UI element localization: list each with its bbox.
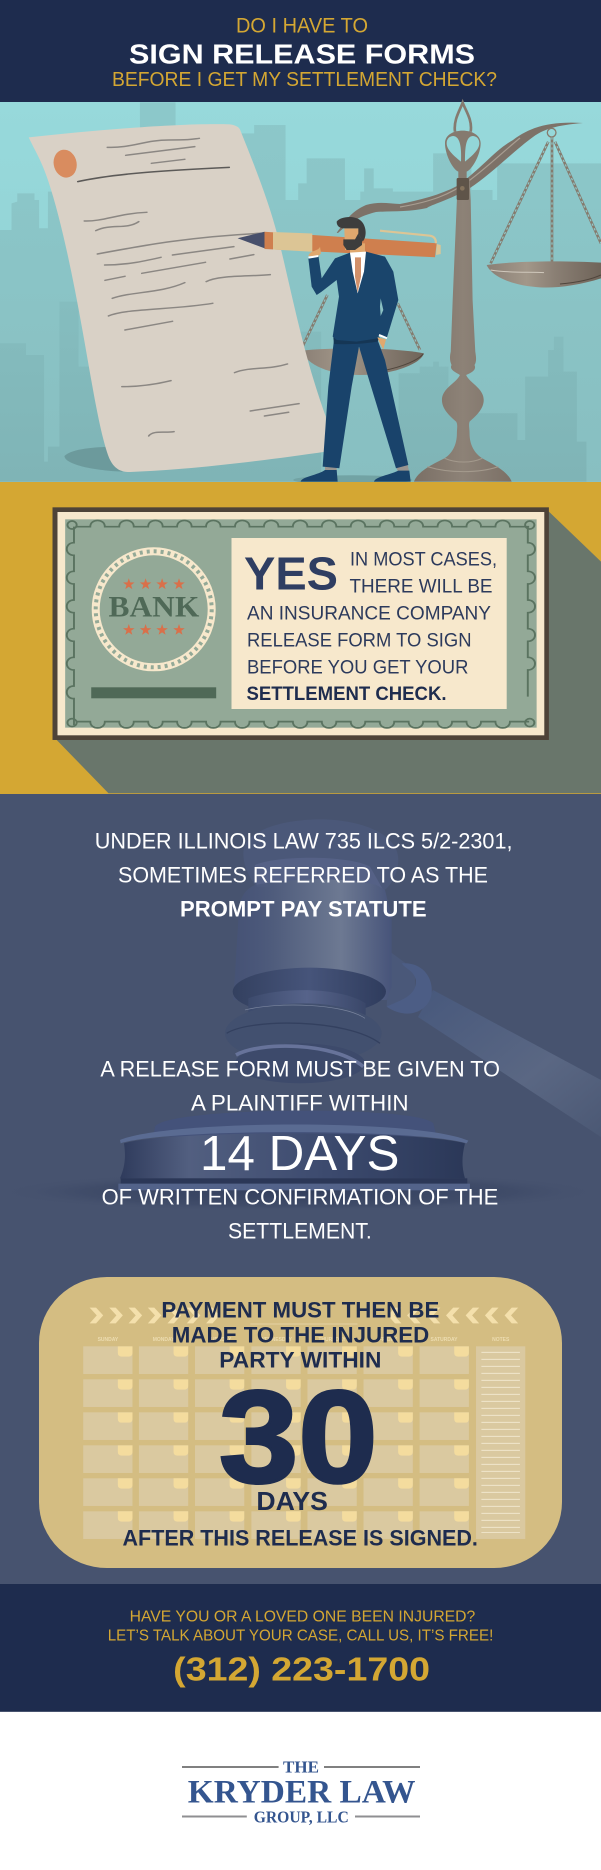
text: release form deadline: A RELEASE FORM MUST BE GIVEN TO	[100, 1056, 500, 1081]
gavel flange	[233, 968, 386, 1016]
hair	[337, 217, 366, 242]
gavel top cap	[243, 819, 398, 892]
logo: The Kryder Law Group, LLC	[182, 1758, 420, 1826]
calendar day labels: THURSDAY	[318, 1337, 346, 1343]
scale: pillar	[414, 178, 512, 482]
logo: The Kryder Law Group, LLC: GROUP, LLC	[254, 1807, 349, 1826]
heading: before I get my settlement check: BEFORE I GET MY SETTLEMENT CHECK?	[112, 69, 497, 91]
calendar day labels: SATURDAY	[431, 1337, 458, 1343]
answer text: SETTLEMENT CHECK.	[246, 683, 446, 705]
calendar text: payment terms	[122, 1297, 478, 1551]
gavel illustration	[0, 819, 601, 1212]
bank seal	[96, 551, 212, 667]
calendar day labels	[98, 1337, 510, 1343]
calendar text: payment terms: DAYS	[256, 1486, 328, 1516]
document seal	[52, 148, 79, 179]
text: release form deadline: A PLAINTIFF WITHIN	[191, 1090, 409, 1115]
text: release form deadline: OF WRITTEN CONFIRMATION OF THE	[102, 1184, 498, 1209]
bank label: BANK	[108, 591, 200, 624]
call to action text	[108, 1608, 493, 1644]
text box: yes answer	[232, 538, 507, 709]
panel: slate section with gavel	[0, 794, 601, 1584]
check frame	[53, 507, 549, 740]
stars	[123, 578, 185, 635]
gavel collar	[387, 952, 415, 1007]
panel: gold bank check section	[0, 482, 601, 794]
scale: left pan and chains	[302, 295, 424, 375]
text: release form deadline: SETTLEMENT.	[228, 1218, 372, 1243]
panel: footer call to action	[0, 1584, 601, 1712]
heading: sign release forms: SIGN RELEASE FORMS	[129, 38, 475, 69]
scale: pivot and top ornament	[445, 103, 601, 287]
chevrons	[90, 1308, 518, 1323]
pen	[238, 231, 441, 257]
sound block	[118, 1111, 470, 1190]
gavel handle	[418, 990, 601, 1137]
call to action text: HAVE YOU OR A LOVED ONE BEEN INJURED?	[130, 1608, 475, 1625]
calendar grid	[83, 1308, 525, 1539]
text: statute: UNDER ILLINOIS LAW 735 ILCS 5/2-2301,	[95, 828, 512, 853]
calendar day labels: TUESDAY	[208, 1337, 232, 1343]
calendar day labels: FRIDAY	[379, 1337, 398, 1343]
heading: do I have to: DO I HAVE TO	[236, 14, 368, 37]
logo: The Kryder Law Group, LLC: KRYDER LAW	[188, 1775, 416, 1811]
check signature bar	[91, 687, 216, 698]
calendar text: payment terms: MADE TO THE INJURED	[172, 1322, 429, 1347]
shirt and tie	[350, 252, 366, 293]
logo: The Kryder Law Group, LLC: THE	[283, 1758, 319, 1777]
calendar text: payment terms: AFTER THIS RELEASE IS SIGNED.	[122, 1526, 478, 1551]
calendar day labels: SUNDAY	[98, 1337, 119, 1343]
calendar card	[39, 1277, 562, 1568]
answer text: BEFORE YOU GET YOUR	[247, 656, 468, 678]
gavel face	[235, 1043, 365, 1083]
long shadow of check	[57, 512, 601, 793]
lawyer figure	[301, 217, 411, 482]
skyline front layer	[0, 302, 586, 482]
scale: beam	[337, 123, 583, 233]
phone number: (312) 223-1700	[173, 1651, 430, 1688]
yes word: YES	[244, 547, 338, 599]
document sheet	[29, 124, 326, 472]
trousers	[323, 339, 408, 468]
gavel lower ring	[225, 1003, 382, 1063]
calendar text: payment terms: PAYMENT MUST THEN BE	[161, 1297, 439, 1322]
document shadow	[64, 447, 123, 472]
check scalloped border	[67, 520, 535, 728]
panel: header title	[0, 0, 601, 102]
skyline back layer	[0, 102, 601, 482]
text: statute	[95, 828, 512, 921]
calendar text: payment terms: PARTY WITHIN	[219, 1347, 381, 1372]
document writing lines	[78, 138, 299, 436]
neck	[350, 243, 365, 255]
jacket	[308, 252, 398, 342]
panel: illustration of document, lawyer and scales	[0, 102, 601, 485]
floor shadow under lawyer	[293, 475, 412, 485]
text: statute: PROMPT PAY STATUTE	[180, 896, 427, 921]
shoes	[301, 470, 411, 482]
socks	[325, 463, 409, 474]
face	[344, 228, 362, 250]
calendar day labels: NOTES	[492, 1337, 510, 1343]
beard	[343, 233, 362, 250]
hands and cuffs	[308, 247, 386, 349]
text: release form deadline	[100, 1056, 500, 1243]
gavel body	[233, 879, 392, 1000]
call to action text: LET’S TALK ABOUT YOUR CASE, CALL US, IT’S FREE!	[108, 1627, 493, 1644]
answer text: RELEASE FORM TO SIGN	[247, 629, 472, 651]
answer text: IN MOST CASES,	[350, 549, 497, 571]
answer text: THERE WILL BE	[350, 576, 492, 598]
text: release form deadline: 14 DAYS	[200, 1127, 399, 1181]
scale: right chains and pan	[487, 128, 601, 287]
answer text	[246, 549, 497, 705]
calendar day labels: WEDNESDAY	[260, 1337, 293, 1343]
text: statute: SOMETIMES REFERRED TO AS THE	[118, 862, 488, 887]
answer text: AN INSURANCE COMPANY	[247, 602, 491, 624]
calendar day labels: MONDAY	[153, 1337, 175, 1343]
calendar text: payment terms: 30	[219, 1363, 378, 1510]
